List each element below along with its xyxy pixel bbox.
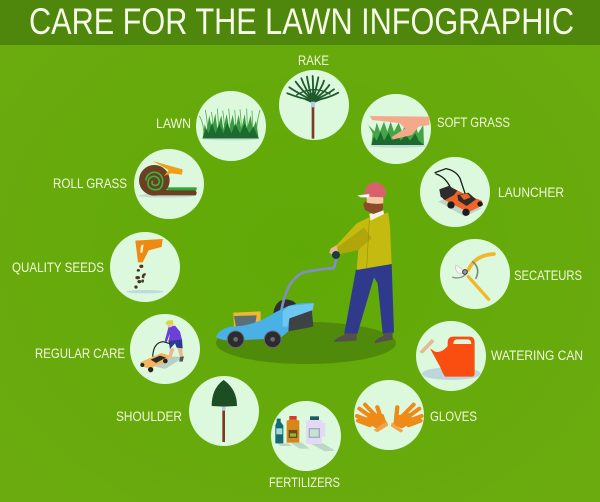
item: quality seeds [12, 232, 180, 302]
icon: gloves [357, 405, 422, 432]
label: fertilizers: FERTILIZERS [269, 475, 340, 490]
item: lawn [156, 91, 266, 161]
icon: rake [287, 76, 338, 139]
ground shadow [216, 322, 396, 364]
man [329, 182, 394, 343]
icon: lawn grass [199, 109, 260, 140]
main figure: man with lawn mower [216, 182, 396, 364]
label: lawn: LAWN [156, 116, 191, 131]
item: gloves [354, 380, 477, 450]
icon: lawn mower [435, 169, 483, 217]
item: launcher [420, 157, 564, 227]
lawn mower [216, 251, 340, 348]
item: shoulder [116, 376, 259, 446]
label: soft grass: SOFT GRASS [437, 115, 510, 130]
icon: person mowing [140, 320, 185, 372]
icon: shovel [212, 380, 237, 442]
label: quality seeds: QUALITY SEEDS [12, 260, 104, 275]
icon: hand touching grass [368, 116, 429, 148]
label: regular care: REGULAR CARE [35, 346, 125, 361]
icon: grass roll [138, 161, 197, 198]
label: shoulder: SHOULDER [116, 409, 182, 424]
item: watering can [416, 321, 583, 391]
icon: watering can [419, 337, 481, 380]
icon: secateurs [453, 254, 494, 299]
item: fertilizers [269, 401, 341, 490]
title banner [0, 0, 600, 45]
label: rake: RAKE [298, 53, 329, 68]
item: secateurs [440, 239, 582, 309]
item: roll grass [53, 149, 204, 219]
label: launcher: LAUNCHER [498, 185, 564, 200]
item: rake [279, 53, 349, 140]
label: secateurs: SECATEURS [514, 268, 582, 283]
icon: seeds [126, 239, 164, 293]
label: roll grass: ROLL GRASS [53, 176, 127, 191]
icon: fertilizer bottles [275, 416, 335, 451]
label: watering can: WATERING CAN [491, 348, 583, 363]
item: soft grass [361, 94, 510, 164]
label: gloves: GLOVES [430, 409, 477, 424]
item: regular care [35, 314, 200, 384]
